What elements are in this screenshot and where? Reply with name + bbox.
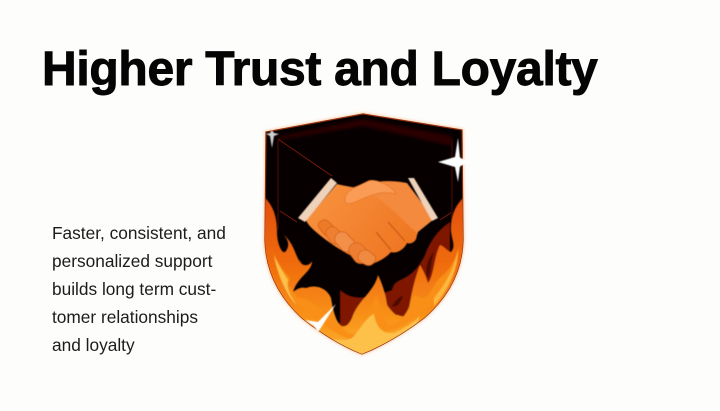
thumb <box>345 180 396 204</box>
icon: flaming shield with handshake <box>262 111 466 356</box>
text block: description: and loyalty <box>52 335 135 355</box>
right hand <box>350 181 434 238</box>
text block: description <box>52 223 226 355</box>
flames <box>265 198 463 354</box>
slide <box>44 50 598 356</box>
handshake <box>298 178 438 265</box>
cuffs <box>298 178 337 222</box>
text block: description: Faster, consistent, and <box>52 223 226 243</box>
left hand <box>306 184 417 264</box>
text block: description: tomer relationships <box>52 307 198 327</box>
shield <box>255 114 470 360</box>
fingers <box>318 220 335 236</box>
text block: description: personalized support <box>52 251 212 271</box>
sparkles <box>266 130 472 332</box>
title: Higher Trust and Loyalty <box>42 43 598 96</box>
text block: description: builds long term cust- <box>52 279 216 299</box>
